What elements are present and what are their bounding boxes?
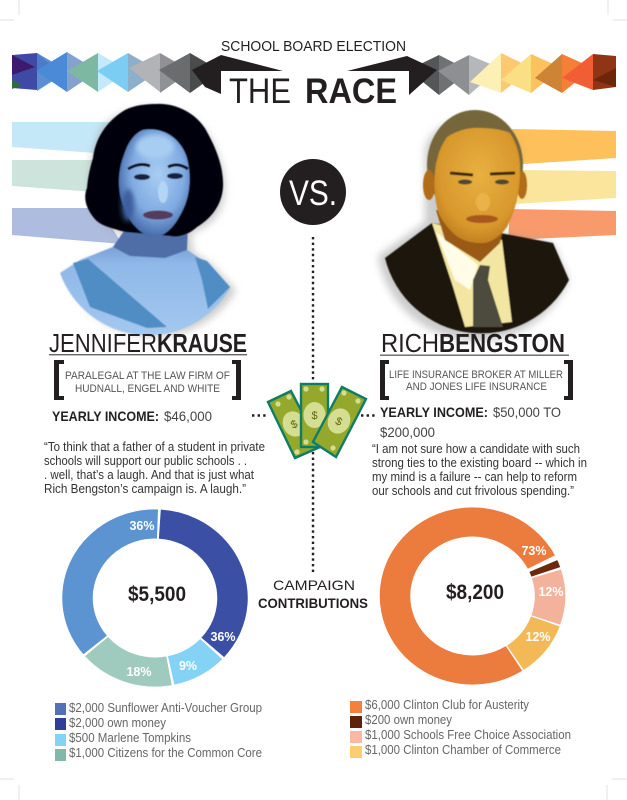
occupation: HUDNALL, ENGEL AND WHITE: [75, 383, 220, 395]
quote: . well, that’s a laugh. And that is just what: [44, 468, 254, 482]
occupation: AND JONES LIFE INSURANCE: [406, 381, 547, 393]
chart: Bengston donut: $8,200: [446, 581, 504, 604]
legend: Krause contributions: $2,000 own money: [69, 716, 167, 730]
VS badge: [280, 159, 346, 225]
legend: Krause contributions: $1,000 Citizens for the Common Core: [69, 746, 262, 760]
chart: Krause donut: 9%: [179, 659, 197, 673]
right bill: $: [333, 415, 344, 429]
chart: Krause donut: [45, 493, 265, 703]
quote: strong ties to the existing board -- which in: [372, 456, 587, 470]
legend: Krause contributions: $2,000 Sunflower Anti-Voucher Group: [69, 701, 262, 715]
banner roof: right: [347, 56, 437, 95]
heading: campaign contributions: CAMPAIGN: [273, 577, 355, 593]
heading: campaign contributions: [258, 577, 368, 611]
chart: Bengston donut: [366, 494, 579, 698]
quote: schools will support our public schools . .: [44, 454, 247, 468]
legend: Krause contributions: $500 Marlene Tompkins: [69, 731, 191, 745]
quote: my mind is a failure -- can help to reform: [372, 470, 577, 484]
legend: Bengston contributions: $6,000 Clinton Club for Austerity: [365, 698, 530, 712]
chart: Bengston donut: 12%: [538, 585, 564, 599]
yearly income: $46,000: [164, 408, 212, 424]
legend: Bengston contributions: $1,000 Clinton Chamber of Commerce: [365, 743, 561, 757]
chart: Bengston donut: 73%: [521, 544, 547, 558]
banner roof: left: [192, 55, 283, 94]
candidate name: JENNIFER: [49, 328, 157, 358]
left colour stripes: [12, 122, 122, 244]
chart: Krause donut: 36%: [129, 519, 155, 533]
candidate name: [380, 328, 569, 358]
dotted divider: [252, 237, 376, 572]
right colour stripes: [508, 129, 616, 240]
quote: Rich Bengston’s campaign is. A laugh.”: [44, 482, 246, 496]
yearly income: $200,000: [380, 424, 435, 440]
yearly income: YEARLY INCOME:: [380, 404, 488, 420]
chart: Krause donut: 36%: [210, 630, 236, 644]
legend: Krause contributions: [55, 701, 262, 761]
yearly income: $50,000 TO: [493, 404, 561, 420]
right banner of triangles: [408, 53, 616, 95]
panel: Rich Bengston text: [372, 328, 587, 498]
legend: Bengston contributions: $200 own money: [365, 713, 453, 727]
occupation: [54, 360, 241, 400]
legend: Bengston contributions: [350, 698, 571, 758]
candidate name: BENGSTON: [439, 328, 565, 358]
quote: “To think that a father of a student in private: [44, 440, 265, 454]
legend: Bengston contributions: $1,000 Schools Free Choice Association: [365, 728, 571, 742]
occupation: PARALEGAL AT THE LAW FIRM OF: [65, 370, 230, 382]
chart: Krause donut: $5,500: [128, 583, 186, 606]
quote: our schools and cut frivolous spending.”: [372, 484, 574, 498]
quote: “I am not sure how a candidate with such: [372, 442, 580, 456]
quote: [372, 442, 587, 498]
left banner of triangles: [12, 52, 221, 93]
occupation: [380, 360, 573, 400]
title bold word: RACE: [305, 72, 397, 111]
candidate name: RICH: [381, 328, 439, 358]
yearly income: [380, 404, 561, 440]
title: THE: [229, 72, 291, 111]
chart: Bengston donut: 12%: [525, 630, 551, 644]
VS badge: VS.: [289, 174, 337, 213]
left bill: $: [289, 418, 300, 432]
panel: Jennifer Krause text: [44, 328, 265, 496]
middle bill: $: [311, 410, 318, 422]
subtitle: SCHOOL BOARD ELECTION: [221, 39, 406, 55]
chart: Krause donut: 18%: [126, 665, 152, 679]
occupation: LIFE INSURANCE BROKER AT MILLER: [389, 369, 563, 381]
icon: money bills: [268, 384, 366, 458]
candidate name: [49, 328, 247, 358]
yearly income: YEARLY INCOME:: [52, 408, 159, 424]
candidate name: KRAUSE: [157, 328, 247, 358]
heading: campaign contributions: CONTRIBUTIONS: [258, 595, 368, 611]
portrait: Jennifer Krause: [60, 104, 236, 336]
portrait: Rich Bengston: [378, 110, 569, 341]
quote: [44, 440, 265, 496]
